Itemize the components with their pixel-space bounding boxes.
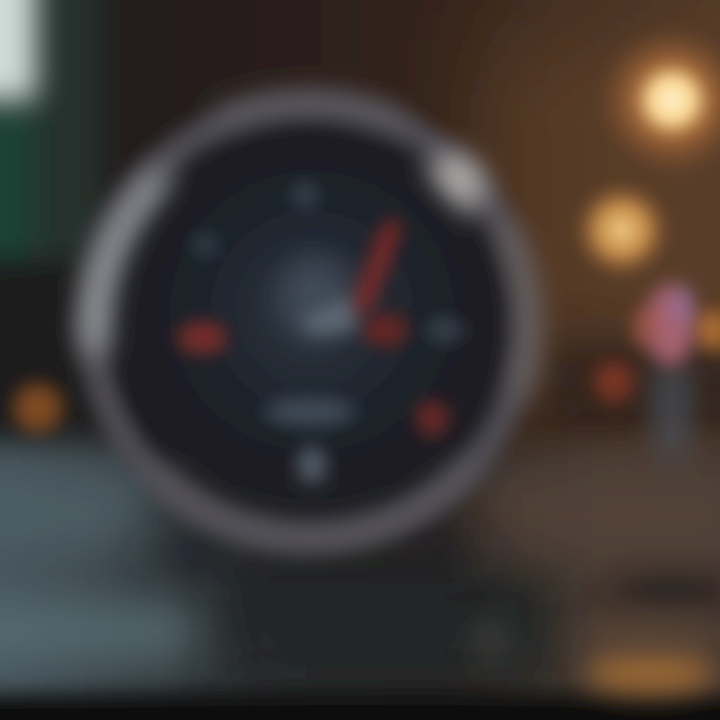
gauge shadow [125,533,505,577]
window at left edge [0,0,100,445]
rim highlight left [96,185,160,340]
bokeh lights [14,22,720,432]
rim highlight upper right [422,156,482,220]
red markers [178,323,226,353]
reflections lower right [470,578,720,692]
blurred figure at right [633,285,694,455]
red needle [362,228,392,305]
dial centre highlight [279,257,351,333]
rim bottom [160,465,470,532]
rim highlight top [220,100,400,122]
dial face [128,136,496,500]
dial tick marks [293,183,317,207]
rim right warm [505,230,530,390]
gauge [91,100,530,577]
table surface [0,445,720,720]
gauge rim [91,106,525,540]
